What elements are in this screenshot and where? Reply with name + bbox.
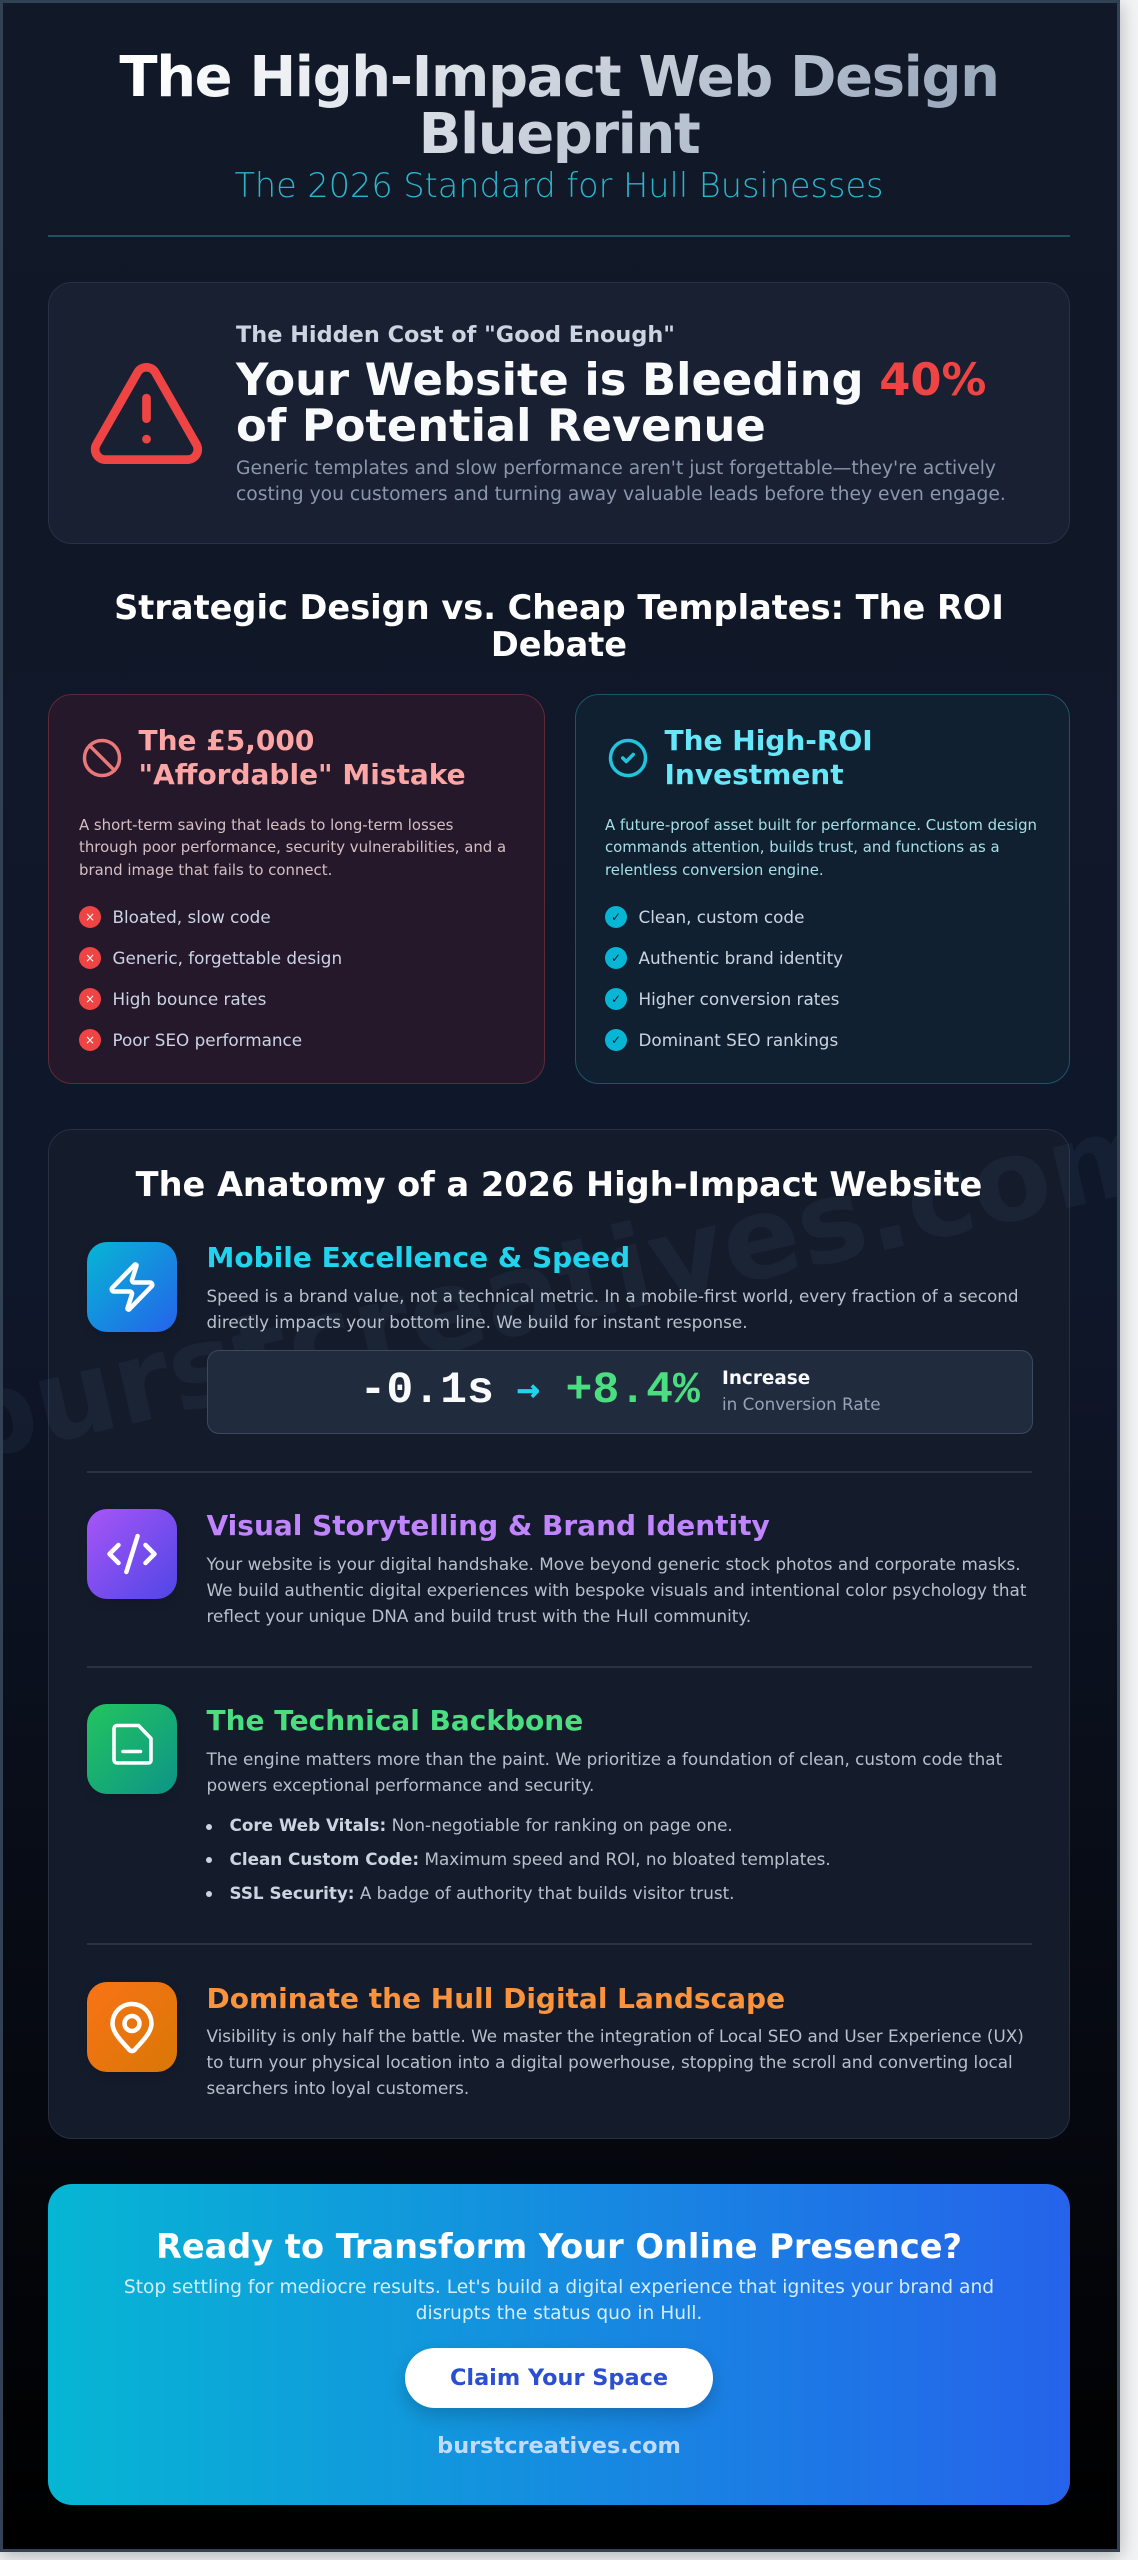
section text: speed (206, 1286, 1018, 1332)
section text: backbone: powers exceptional performance and security. (206, 1775, 594, 1795)
metric label: Increase (722, 1368, 810, 1389)
button: claim your space (405, 2348, 713, 2408)
CTA heading: Ready to Transform Your Online Presence? (156, 2227, 962, 2266)
section text: storytelling: We build authentic digital experiences with bespoke visuals and intentional color psychology that (206, 1580, 1026, 1600)
card text: investment (605, 816, 1037, 879)
website link: burstcreatives.com (437, 2433, 681, 2459)
list: mistake items: High bounce rates (112, 989, 266, 1009)
section heading: local: Dominate the Hull Digital Landscape (206, 1982, 785, 2015)
list: investment items (605, 906, 843, 1051)
metric label: in Conversion Rate (722, 1394, 881, 1414)
alert headline (236, 353, 986, 452)
panel: affordable mistake (48, 694, 545, 1084)
button: claim your space: Claim Your Space (450, 2365, 668, 2391)
CTA text: disrupts the status quo in Hull. (416, 2303, 702, 2324)
list: backbone points: SSL Security: A badge of authority that builds visitor trust. (230, 1882, 734, 1902)
card title: investment: Investment (664, 758, 844, 791)
list: mistake items: × (85, 910, 95, 924)
section text: backbone (206, 1749, 1002, 1795)
alert text: Generic templates and slow performance aren't just forgettable—they're actively (236, 458, 996, 478)
section heading: storytelling: Visual Storytelling & Brand Identity (206, 1509, 770, 1542)
panel: hidden cost alert (48, 282, 1070, 544)
icon: code (87, 1509, 177, 1599)
metric box (206, 1350, 1032, 1434)
section text: backbone: The engine matters more than the paint. We prioritize a foundation of clean, custom code that (206, 1749, 1002, 1769)
metric label (722, 1368, 881, 1414)
section text: storytelling (206, 1554, 1026, 1626)
icon: location pin (87, 1982, 177, 2072)
list: backbone points: Core Web Vitals: Non-negotiable for ranking on page one. (230, 1815, 733, 1835)
section heading: backbone: The Technical Backbone (206, 1704, 583, 1737)
list: investment items: ✓ (611, 1033, 621, 1047)
list: mistake items: Generic, forgettable design (112, 948, 342, 968)
heading: anatomy: The Anatomy of a 2026 High-Impact Website (136, 1165, 982, 1204)
alert headline: Your Website is Bleeding 40% (236, 353, 986, 406)
alert headline: of Potential Revenue (236, 399, 766, 452)
section text: storytelling: Your website is your digital handshake. Move beyond generic stock photos and corporate masks. (206, 1554, 1021, 1574)
panel: call to action (48, 2184, 1070, 2505)
icon: ban (82, 738, 122, 778)
card title: mistake: "Affordable" Mistake (138, 758, 466, 791)
metric: load time: -0.1s (360, 1366, 494, 1416)
list: investment items: Authentic brand identity (638, 948, 843, 968)
card text: investment: commands attention, builds trust, and functions as a (605, 838, 1000, 856)
card text: mistake: A short-term saving that leads to long-term losses (79, 816, 453, 834)
title: Blueprint (419, 102, 699, 167)
card title: mistake (138, 724, 466, 791)
list: mistake items: Poor SEO performance (112, 1030, 302, 1050)
list: backbone points: Clean Custom Code: Maximum speed and ROI, no bloated templates. (230, 1848, 831, 1868)
heading: ROI debate: Strategic Design vs. Cheap Templates: The ROI (114, 588, 1004, 627)
icon: circle check (608, 738, 648, 778)
section text: storytelling: reflect your unique DNA and build trust with the Hull community. (206, 1606, 751, 1626)
CTA text: Stop settling for mediocre results. Let's build a digital experience that ignites your brand and (124, 2276, 994, 2298)
heading: ROI debate: Debate (491, 625, 627, 664)
card text: investment: A future-proof asset built for performance. Custom design (605, 816, 1037, 834)
title: The High-Impact Web Design (119, 45, 999, 110)
panel: high ROI investment (575, 694, 1070, 1084)
card title: investment: The High-ROI (664, 724, 873, 757)
list: investment items: Dominant SEO rankings (638, 1030, 838, 1050)
heading: ROI debate (114, 588, 1004, 664)
card title: mistake: The £5,000 (138, 724, 314, 757)
CTA text (124, 2276, 994, 2324)
list: investment items: ✓ (611, 951, 621, 965)
section text: local (206, 2026, 1024, 2098)
section heading: speed: Mobile Excellence & Speed (206, 1241, 630, 1274)
section text: speed: directly impacts your bottom line. We build for instant response. (206, 1312, 748, 1332)
list: investment items: Clean, custom code (638, 907, 804, 927)
section text: speed: Speed is a brand value, not a technical metric. In a mobile-first world, every fraction of a second (206, 1286, 1018, 1306)
icon: document (87, 1704, 177, 1794)
list: mistake items: × (85, 951, 95, 965)
alert text: costing you customers and turning away valuable leads before they even engage. (236, 484, 1006, 505)
card text: mistake: through poor performance, security vulnerabilities, and a (79, 838, 506, 856)
list: investment items: ✓ (611, 910, 621, 924)
card text: investment: relentless conversion engine. (605, 861, 824, 879)
list: mistake items: × (85, 992, 95, 1006)
list: mistake items: Bloated, slow code (112, 907, 271, 927)
alert text (236, 458, 1006, 505)
section text: local: to turn your physical location into a digital powerhouse, stopping the scroll and converting local (206, 2052, 1013, 2072)
section text: local: searchers into loyal customers. (206, 2078, 469, 2098)
card text: mistake: brand image that fails to connect. (79, 861, 332, 879)
card text: mistake (79, 816, 506, 879)
alert kicker: The Hidden Cost of "Good Enough" (236, 322, 675, 348)
list: backbone points (206, 1815, 831, 1902)
arrow: → (516, 1374, 540, 1407)
metric: conversion gain: +8.4% (566, 1366, 700, 1416)
list: investment items: ✓ (611, 992, 621, 1006)
list: mistake items: × (85, 1033, 95, 1047)
section text: local: Visibility is only half the battle. We master the integration of Local SEO and User Experience (UX) (206, 2026, 1024, 2046)
title (48, 49, 1070, 163)
panel: anatomy (48, 1129, 1070, 2139)
list: investment items: Higher conversion rates (638, 989, 839, 1009)
list: mistake items (79, 906, 342, 1051)
card title: investment (664, 724, 873, 791)
subtitle: The 2026 Standard for Hull Businesses (234, 166, 884, 205)
icon: lightning bolt (87, 1242, 177, 1332)
icon: warning triangle (90, 363, 202, 464)
